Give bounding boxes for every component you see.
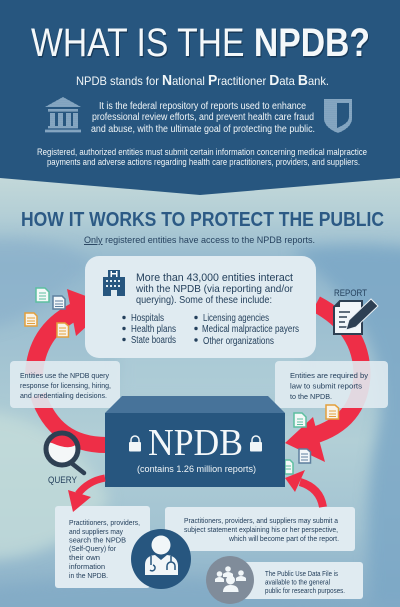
intro text: and abuse, with the ultimate goal of protecting the public. xyxy=(91,124,315,135)
icon: right orange document xyxy=(326,405,338,419)
panel: entities: More than 43,000 entities interact xyxy=(136,272,293,284)
panel: public use data file: The Public Use Data File is xyxy=(265,569,338,578)
panel: entities: querying). Some of these include: xyxy=(136,294,272,306)
icon: shield xyxy=(324,99,352,133)
panel: entities use query: response for licensing, hiring, xyxy=(20,381,111,390)
intro text: professional review efforts, and prevent health care fraud xyxy=(92,112,314,123)
label: report: REPORT xyxy=(334,288,367,299)
icon: public group xyxy=(206,556,254,604)
icon: doctor xyxy=(131,529,191,589)
icon: right blue document xyxy=(299,449,310,463)
panel: entities required xyxy=(275,361,388,408)
panel: subject statement: subject statement explaining his or her perspective, xyxy=(184,525,338,534)
panel: self-query: Practitioners, providers, xyxy=(69,518,140,527)
icon: blue document xyxy=(53,296,65,309)
icon: left lock xyxy=(129,436,141,452)
subtitle: NPDB stands for National Practitioner Data Bank. xyxy=(76,72,329,89)
list: entity types left xyxy=(122,313,176,346)
registered entities text xyxy=(37,147,367,167)
icon: hospital xyxy=(103,270,125,296)
icon: lower green document xyxy=(285,460,293,474)
panel: self-query: their own xyxy=(69,553,100,562)
NPDB box xyxy=(105,396,285,487)
list: entity types left: Health plans xyxy=(131,324,176,335)
panel: self-query xyxy=(55,506,150,588)
arrow: NPDB to query xyxy=(38,395,106,445)
icon: orange document xyxy=(25,313,37,326)
panel: entities use query: Entities use the NPDB query xyxy=(20,371,109,380)
title: WHAT IS THE NPDB? xyxy=(32,22,371,66)
icon: orange document xyxy=(57,323,68,337)
background xyxy=(0,170,400,607)
panel: entities use query: and credentialing decisions. xyxy=(20,391,107,400)
arrow: query to entities xyxy=(34,289,110,375)
panel: self-query: information xyxy=(69,562,105,571)
panel: public use data file: public for research purposes. xyxy=(265,586,345,595)
registered entities text: Registered, authorized entities must submit certain information concerning medical malpractice xyxy=(37,147,367,157)
subheading: Only registered entities have access to the NPDB reports. xyxy=(84,235,315,246)
panel: entities required: to the NPDB. xyxy=(290,392,332,401)
arrow: subject statement xyxy=(285,470,323,507)
list: entity types left: Hospitals xyxy=(131,313,164,324)
label: query: QUERY xyxy=(48,475,78,486)
list: entity types right: Other organizations xyxy=(203,336,274,347)
panel: self-query: search the NPDB xyxy=(69,536,126,544)
arrow: report to NPDB xyxy=(285,304,362,462)
list: entity types right: Medical malpractice payers xyxy=(202,324,299,335)
panel: self-query: in the NPDB. xyxy=(69,571,108,580)
NPDB box: (contains 1.26 million reports) xyxy=(137,464,256,475)
arrow: self-query xyxy=(68,478,105,512)
NPDB box: NPDB xyxy=(148,422,243,464)
panel: subject statement xyxy=(165,507,355,551)
registered entities text: payments and adverse actions regarding health care practitioners, providers, and suppliers. xyxy=(47,157,360,167)
panel: public use data file: available to the general xyxy=(265,578,330,586)
panel: entities: with the NPDB (via reporting and/or xyxy=(135,283,293,295)
intro text: It is the federal repository of reports used to enhance xyxy=(99,101,306,112)
icon: report and pencil xyxy=(334,299,378,334)
icon: right green document xyxy=(294,413,306,427)
icon: magnifying glass xyxy=(45,432,84,473)
panel: subject statement: which will become part of the report. xyxy=(228,534,339,543)
icon: green document xyxy=(36,288,49,302)
panel: entities required: Entities are required by xyxy=(290,371,368,380)
title: WHAT IS THE NPDB? xyxy=(31,21,370,65)
panel: entities required: law to submit reports xyxy=(290,382,362,390)
panel: entities use query xyxy=(10,361,120,408)
panel: entities xyxy=(85,256,316,358)
list: entity types left: State boards xyxy=(131,335,176,346)
panel: subject statement: Practitioners, providers, and suppliers may submit a xyxy=(184,516,339,525)
intro text xyxy=(91,101,315,135)
icon: right lock xyxy=(250,436,262,452)
list: entity types right: Licensing agencies xyxy=(203,313,269,324)
list: entity types right xyxy=(194,313,299,347)
icon: federal building xyxy=(45,97,81,132)
panel: self-query: and suppliers may xyxy=(69,527,123,536)
header band xyxy=(0,0,400,195)
panel: public use data file xyxy=(230,562,363,599)
panel: self-query: (Self-Query) for xyxy=(69,544,116,553)
